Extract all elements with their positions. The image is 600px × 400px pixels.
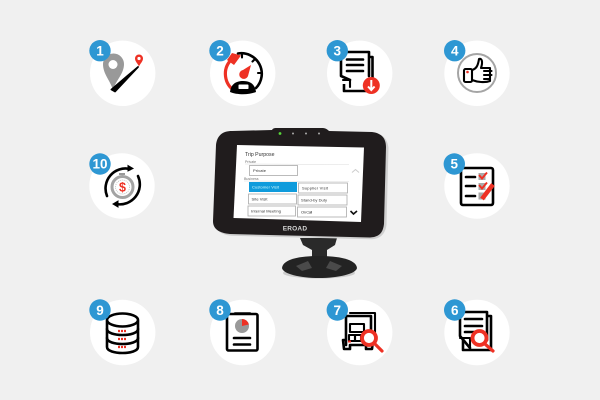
item 6: document search icon bbox=[444, 299, 510, 365]
item 9: database icon bbox=[89, 299, 155, 365]
icon: documents with magnifier bbox=[460, 312, 493, 351]
item 4: thumbs up icon bbox=[444, 40, 510, 106]
device: EROAD tablet on mount bbox=[213, 128, 388, 278]
item 8: report clipboard icon bbox=[209, 299, 275, 365]
icon: truck with magnifier bbox=[343, 313, 382, 351]
icon: map pins and route bbox=[103, 54, 143, 92]
badge: 4: 4 bbox=[451, 44, 459, 58]
badge: 3: 3 bbox=[334, 44, 342, 58]
item 7: truck inspection icon bbox=[327, 299, 392, 365]
device screen: Private bbox=[245, 160, 256, 164]
device screen: Customer Visit bbox=[252, 184, 280, 190]
device mount bbox=[282, 238, 357, 278]
device screen: On Call bbox=[301, 210, 312, 214]
icon: speedometer bbox=[225, 53, 262, 94]
icon: documents with download arrow bbox=[341, 52, 380, 94]
item 10: money stopwatch icon bbox=[89, 153, 155, 219]
badge: 10: 10 bbox=[92, 157, 108, 172]
device body bbox=[213, 128, 388, 239]
badge: 8: 8 bbox=[216, 303, 224, 318]
icon: clipboard with pie chart bbox=[227, 314, 258, 350]
item 5: checklist icon bbox=[444, 153, 510, 219]
badge: 5: 5 bbox=[451, 157, 459, 172]
device screen: Trip Purpose bbox=[245, 152, 275, 158]
icon: database stack bbox=[107, 314, 138, 353]
badge: 9: 9 bbox=[96, 303, 104, 318]
item 2: speedometer icon bbox=[209, 40, 275, 106]
icon: thumbs up in ring bbox=[458, 54, 496, 92]
device screen: Supplier Visit bbox=[302, 186, 329, 190]
badge: 2: 2 bbox=[216, 44, 224, 58]
item 1: route location icon bbox=[89, 40, 155, 106]
badge: 7: 7 bbox=[334, 303, 341, 318]
device screen bbox=[234, 145, 364, 222]
device screen: Business bbox=[244, 177, 259, 181]
device screen: Private bbox=[253, 168, 267, 173]
device screen: Site Visit bbox=[252, 196, 268, 202]
device screen: Internal Meeting bbox=[251, 208, 281, 214]
device logo: EROAD bbox=[283, 226, 307, 232]
device screen: Stand-by Duty bbox=[301, 198, 327, 202]
item 3: document download icon bbox=[327, 40, 392, 106]
badge: 1: 1 bbox=[96, 44, 104, 58]
icon: clipboard checklist with pen bbox=[461, 168, 493, 205]
badge: 6: 6 bbox=[451, 303, 459, 318]
icon: stopwatch with dollar and cycle arrows: $ bbox=[119, 180, 126, 194]
